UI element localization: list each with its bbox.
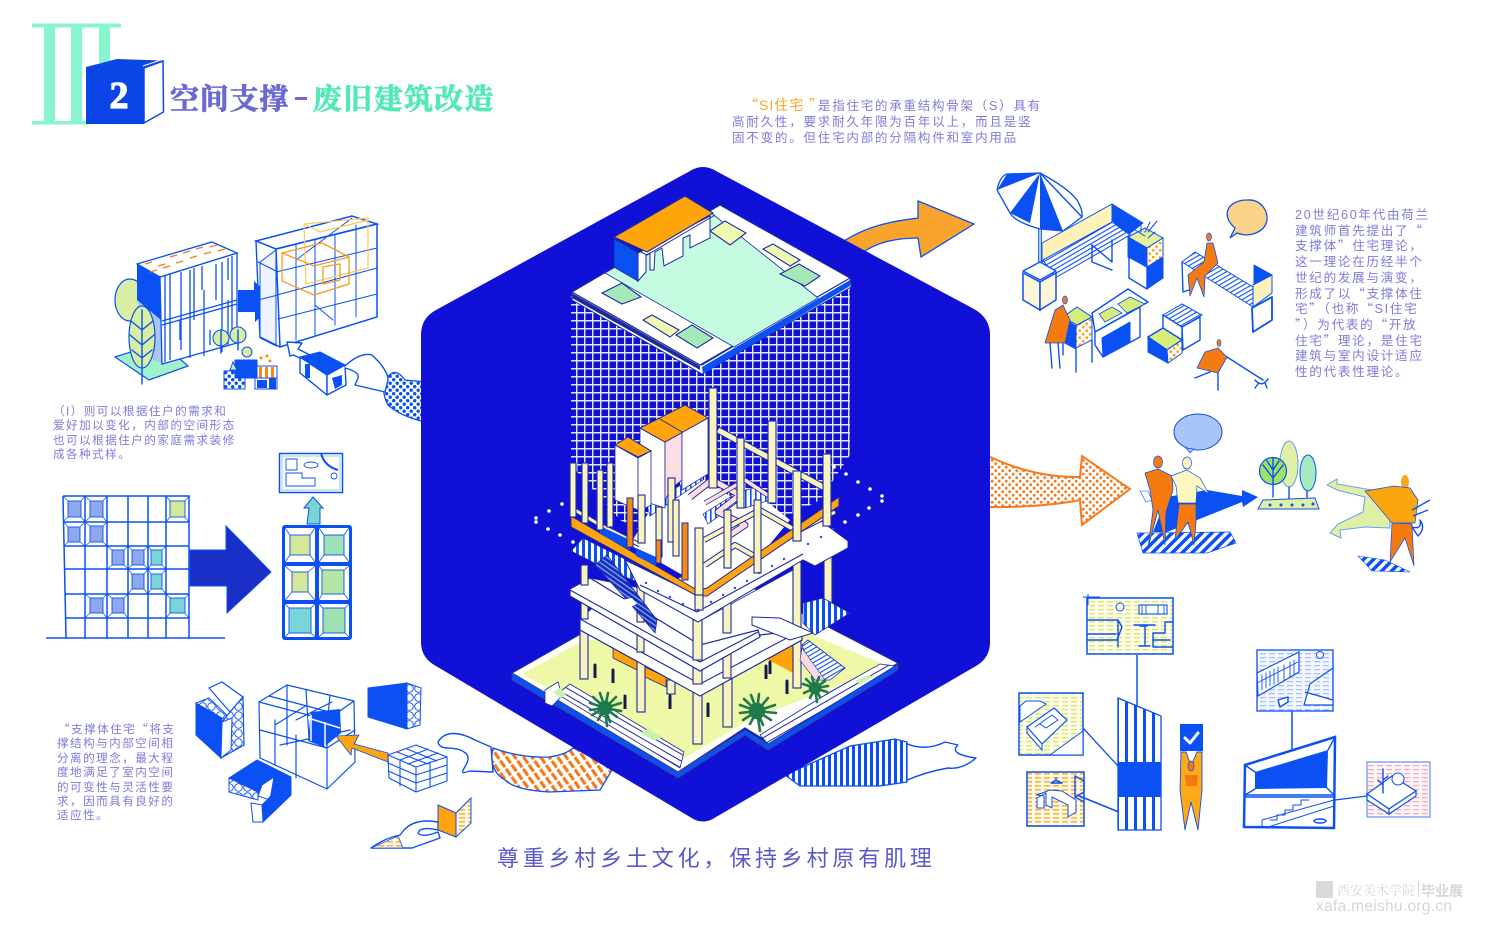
text: support body theory history: 住宅”理论，是住宅 <box>1295 330 1424 349</box>
illustration: hand holding block with cursor arrow <box>287 342 388 395</box>
illustration: blue block with honeycomb side <box>368 683 421 729</box>
illustration: striped sleeve and hand at bottom right of hexagon <box>785 739 976 786</box>
illustration: small blocks and plants <box>224 347 277 389</box>
illustration: stacked stool boxes <box>1148 304 1202 363</box>
watermark: 毕业展 <box>1421 883 1463 899</box>
towers <box>640 428 665 508</box>
pink beams <box>690 480 775 535</box>
illustration: top interior panel <box>1083 594 1173 706</box>
icon: people on plaza <box>594 660 788 717</box>
text: support body housing description <box>57 721 175 822</box>
illustration: person pointing with split arrow <box>1327 475 1430 572</box>
illustration: wire cube with module <box>259 685 355 789</box>
text: SI housing definition: “SI住宅 ” <box>744 95 824 115</box>
text: SI housing definition <box>732 95 1042 145</box>
text: support body theory history: 形成了以“支撑体住 <box>1295 283 1424 302</box>
icon: section marker III with numbered box <box>32 24 164 124</box>
illustration: hand with patterned sleeve at bottom left of hexagon <box>438 734 615 792</box>
ground columns <box>580 627 588 679</box>
watermark: xafa.meishu.org.cn <box>1316 898 1452 915</box>
text: support body theory history: 20世纪60年代由荷兰 <box>1295 208 1430 222</box>
cream beams <box>575 430 835 565</box>
text: infill variation description: 爱好加以变化，内部的空间形态 <box>53 418 236 432</box>
planter squares <box>602 221 820 348</box>
striped left balcony <box>571 538 637 582</box>
illustration: window module panel <box>282 525 352 640</box>
watermark: 西安美术学院 <box>1337 883 1415 898</box>
illustration: orange office panel <box>1027 772 1131 826</box>
text: support body housing description: 撑结构与内部空间相 <box>57 736 174 750</box>
text: infill variation description <box>53 404 236 461</box>
illustration: left maze panel <box>1019 693 1118 766</box>
text: infill variation description: 成各种式样。 <box>53 447 131 461</box>
text: support body theory history: 性的代表性理论。 <box>1295 364 1409 379</box>
rooftop volume <box>614 238 638 281</box>
title: 空间支撑 <box>170 83 289 116</box>
orange accent walls <box>613 648 637 670</box>
striped balcony <box>803 598 850 635</box>
white core body <box>570 570 793 668</box>
text: support body theory history <box>1295 208 1430 379</box>
orange ring <box>571 497 839 596</box>
illustration: striped tower <box>1118 698 1161 830</box>
plaza steps <box>545 664 895 768</box>
icon: girl walking dog <box>1195 340 1268 390</box>
text: support body theory history: 世纪的发展与演变， <box>1295 270 1424 285</box>
illustration: floor plan frame <box>280 453 342 492</box>
illustration: pink plant panel <box>1335 762 1430 817</box>
slab C platform <box>625 518 848 622</box>
illustration: two people discussing <box>1137 414 1258 553</box>
illustration: central building structure <box>570 388 850 744</box>
caption: respect rural culture: 尊重乡村乡土文化，保持乡村原有肌理 <box>497 846 936 871</box>
accent dots along slab C <box>645 528 834 611</box>
arrow: orange arrow into cube <box>336 735 388 762</box>
text: support body theory history: 建筑与室内设计适应 <box>1295 348 1424 363</box>
text: support body housing description: “支撑体住宅“将支 <box>58 721 175 737</box>
panel: blue hexagon background <box>421 167 990 822</box>
text: support body theory history: 宅”（也称“SI住宅 <box>1295 298 1418 317</box>
text: support body housing description: 求，因而具有良好的 <box>57 794 174 808</box>
text: infill variation description: 也可以根据住户的家庭需求装修 <box>53 433 236 447</box>
illustration: counter with yellow tops and woman <box>1045 289 1148 372</box>
arrow: orange curved arrow from hexagon <box>825 201 974 265</box>
watermark <box>1316 881 1463 915</box>
text: support body theory history: 这一理论在历经半个 <box>1295 254 1424 269</box>
roof garden mint area <box>605 212 818 347</box>
icon: trees on planter <box>1258 441 1319 509</box>
illustration: ground plaza floor <box>512 563 898 778</box>
illustration: stepped blue block <box>229 760 291 822</box>
text: SI housing definition: 是指住宅的承重结构骨架（S）具有 <box>818 98 1042 113</box>
mid columns <box>693 620 702 660</box>
hatched walls <box>647 472 703 516</box>
text: support body theory history: ”）为代表的“开放 <box>1295 314 1417 333</box>
text: support body housing description: 适应性。 <box>57 808 109 822</box>
staircase dark <box>595 555 657 633</box>
illustration: bookshelf panel <box>1257 650 1333 760</box>
illustration: rooftop slab <box>572 196 851 374</box>
illustration: book held by hand <box>371 798 471 848</box>
icon: section marker III with numbered box: 2 <box>110 75 128 117</box>
stair right <box>802 640 845 680</box>
illustration: wireframe building with orange inner volumes <box>256 216 377 347</box>
floor slab A <box>580 608 802 696</box>
text: support body housing description: 的可变性与灵活性要 <box>57 780 174 794</box>
arrow: small teal up arrow <box>304 497 323 524</box>
decoration: white dots around building <box>534 465 884 544</box>
text: infill variation description: （I）则可以根据住户的需求和 <box>53 404 227 418</box>
landing <box>752 617 813 640</box>
upper columns <box>709 388 717 488</box>
text: support body theory history: 建筑师首先提出了“ <box>1295 220 1424 239</box>
arrow: dotted orange arrow to people <box>980 452 1130 525</box>
title <box>170 83 495 116</box>
upper open floor <box>630 478 790 588</box>
arrow: blue arrow to wireframe <box>238 281 276 322</box>
text: support body theory history: 支撑体”住宅理论， <box>1295 235 1424 254</box>
floor slab B <box>570 578 760 671</box>
illustration: large framed box with stairs <box>1244 737 1335 828</box>
illustration: umbrella and L-shaped bench <box>997 173 1163 310</box>
illustration: right bench with seated person <box>1182 200 1272 332</box>
text: SI housing definition: 固不变的。但住宅内部的分隔构件和室内用品 <box>732 130 1018 145</box>
icon: person holding check sign <box>1180 724 1203 830</box>
illustration: honeycomb block top-left <box>196 682 244 758</box>
chart: window grid facade <box>46 496 225 638</box>
title: 废旧建筑改造 <box>313 83 495 116</box>
chart: white grid facade behind building <box>571 282 850 560</box>
text: support body housing description: 分离的理念，最大程 <box>57 751 174 765</box>
icon: palm trees <box>590 677 828 731</box>
illustration: polka-dot sleeve at left of hexagon <box>384 372 425 422</box>
text: SI housing definition: 高耐久性，要求耐久年限为百年以上，而且是竖 <box>732 114 1032 129</box>
illustration: top-left building with trees <box>115 242 246 384</box>
text: support body housing description: 度地满足了室内空间 <box>57 765 174 779</box>
arrow: dark blue arrow to window panel <box>190 526 271 613</box>
illustration: small wire cube in hand <box>388 745 447 792</box>
